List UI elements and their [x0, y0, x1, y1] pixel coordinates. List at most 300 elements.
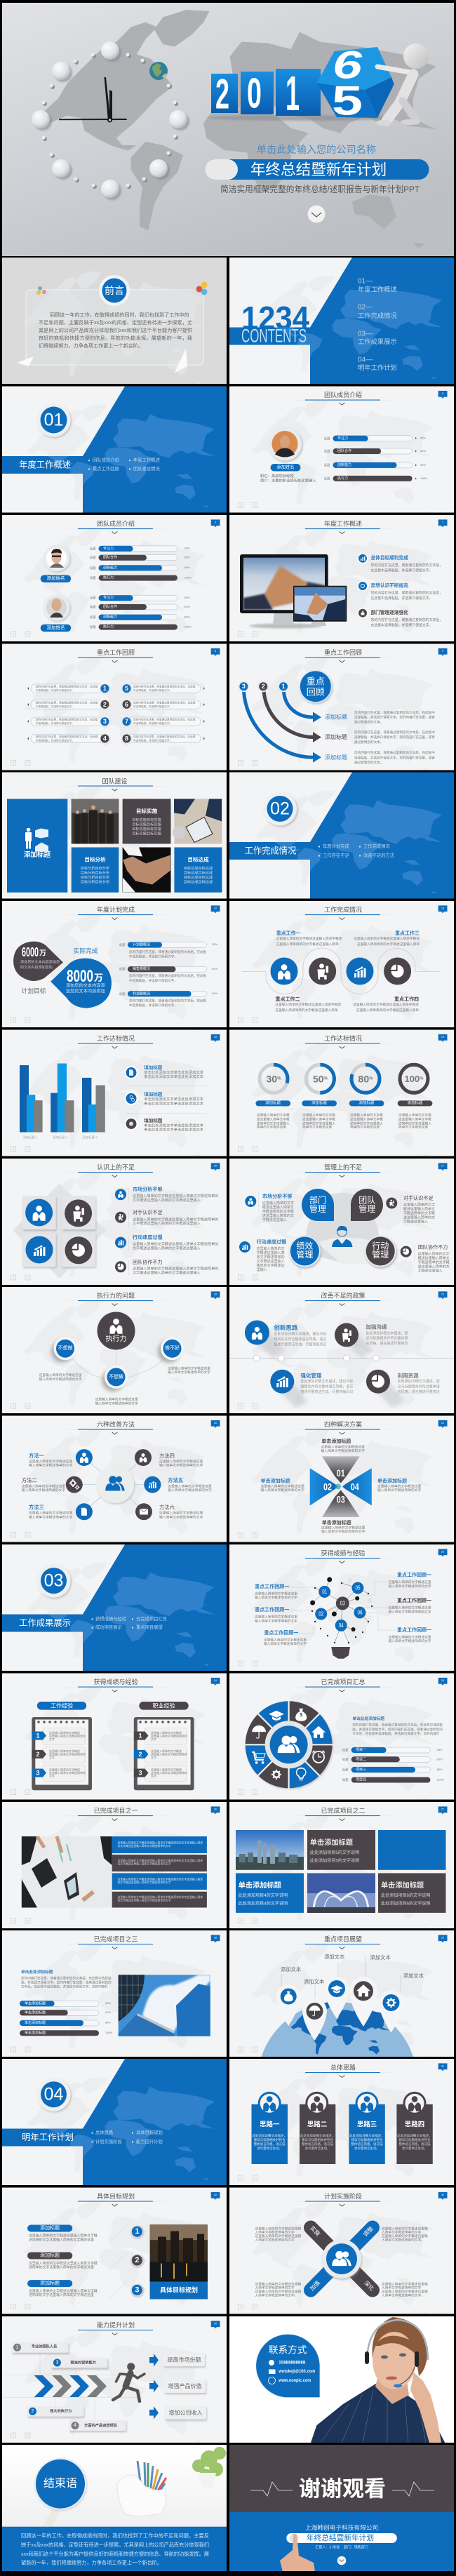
project bars: 单击添加标题 [25, 2001, 46, 2006]
heading: 重点工作回顾 [97, 648, 135, 656]
bar chart: 添加标题 3 [82, 1135, 98, 1140]
pin labels: 添加文本 [304, 1979, 325, 1984]
shortfall list: 团队协作不力 [133, 1259, 163, 1265]
text tiles [112, 1836, 207, 1907]
text tiles: 的文字概述这里输入简单文字概述简单的文字 [118, 1881, 171, 1884]
preface text block: 不足和问题，主要反映于xx及xxx的风格、定型还有待进一步探索，尤 [39, 319, 192, 326]
notebook: work experience [32, 1702, 92, 1790]
notebook: career experience: 这里输入简单文字概述简单的 [151, 1770, 187, 1775]
skill bars two: 标题 [90, 625, 96, 629]
section bullets: 总体思路 [95, 2129, 114, 2135]
skill bars [324, 436, 428, 481]
department management drop: 部门 [309, 1195, 326, 1206]
blue tile: goal achieved [174, 848, 222, 893]
skill bars: 专注力 [337, 436, 348, 441]
gauge 100%: 100% [404, 1074, 424, 1084]
right numbered pills: 您的内容打在这里，或者通过复制您的文本后，在此框 [133, 685, 196, 688]
achievement list: 您的内容打在这里，或者通过复制您的文本后， [370, 591, 443, 595]
note bottom-left: 字概述这里输入简 [257, 1250, 285, 1255]
description [352, 1716, 443, 1736]
blue tile: goal analysis: 目标分析目标分析 [81, 865, 109, 871]
blue tile: goal achieved: 目标达成 [187, 856, 209, 863]
four icon circles [271, 957, 411, 985]
heading: 21 [441, 1422, 444, 1424]
portrait two [43, 594, 71, 622]
key work text top-right [354, 930, 420, 947]
heading: 14 [441, 1036, 444, 1039]
central dark circle: 执行力 [105, 1334, 126, 1343]
note upper-right: 入简单文字概述简单的文字 [382, 2230, 422, 2235]
item resources [366, 1370, 440, 1408]
heading [239, 648, 448, 765]
white 3D figure pushing cube [376, 44, 429, 126]
heading: 获得成绩与经验 [93, 1678, 138, 1686]
heading [239, 1291, 448, 1408]
note bottom-left [239, 1239, 286, 1272]
notebook: career experience: 1 [138, 1732, 142, 1739]
right labels: 重点工作回顾一 [397, 1627, 431, 1633]
outcome arrows and cards: 增加公司收入 [168, 2409, 202, 2416]
method notes: 输入简单文字概述简单的文字 [159, 1514, 203, 1520]
progress bars with notes: 中选择粘贴，并选择只保留文字。 [129, 978, 177, 983]
gauge notes: 述简单的文字这里输入 [257, 1121, 290, 1126]
key work text top-left: 重点工作一 [276, 930, 301, 936]
clock hands [59, 77, 127, 122]
caption pills: 添加标题 [311, 1100, 327, 1105]
blue tile: goal achieved: 目标达成目标达成 [184, 879, 213, 884]
blue tile project four: 此处添加项目4的文字说明 [239, 1900, 288, 1906]
bio: 职位：高级项目经理 [260, 473, 294, 479]
contents list: 工作完成情况 [358, 312, 397, 319]
section bullets: 团队建设情况 [133, 465, 160, 472]
skill bars: 团队合作 [337, 448, 351, 453]
note upper-left: 入简单文字概述简单的文字 [255, 2237, 295, 2242]
dark tile: goal implementation: 目标实施目标实施 [132, 821, 161, 827]
skill bars: 创新能力 [337, 462, 351, 467]
note top-right: 述这里输入简单的文 [403, 1215, 435, 1220]
item resources: 言风格，语言描述尽量简洁 [398, 1389, 440, 1394]
note top-right: 字概述这里输入 [403, 1220, 428, 1224]
key work text bottom-right: 重点工作四 [394, 996, 419, 1002]
heading: 认识上的不足 [97, 1163, 135, 1170]
heading: 获得成绩与经验 [321, 1549, 366, 1556]
section title: 工作成果展示 [19, 1618, 71, 1628]
right numbered pills: 您的内容打在这里，或者通过复制您的文本后，在此框 [133, 735, 196, 738]
lightbulb network [310, 1577, 373, 1659]
world map backdrop [39, 10, 436, 248]
note bottom-left: 文字概述这里输入 [257, 1259, 285, 1264]
gauge notes: 这里输入简单的文字概 [350, 1112, 383, 1117]
capability cards: 丰富的产品运营经验 [84, 2422, 118, 2428]
heading: 工作完成情况 [324, 905, 362, 914]
blue tile project four: 此处添加项目4的文字说明 [239, 1893, 288, 1898]
skill bars one: 60% [184, 556, 190, 559]
note lower-right [382, 2281, 428, 2297]
photo: pencil holder and plant [43, 2447, 226, 2526]
notebook: career experience: 3 [138, 1770, 142, 1777]
gauge notes: 简单的文字概述这里 [398, 1124, 429, 1130]
note right: 这里输入简单的文字概述这里 [168, 1366, 210, 1371]
right labels: 重点工作回顾一 [397, 1571, 431, 1577]
achievement list: 总体目标顺利完成 [370, 554, 408, 561]
guide lines [2, 2353, 142, 2420]
card three: 述尽量简洁生动。 [354, 2146, 380, 2151]
gauge notes: 述这里输入简单文字概 [302, 1116, 335, 1121]
pin labels: 添加文本 [324, 1954, 345, 1960]
note left [261, 1478, 304, 1493]
contents list: 03— [358, 330, 373, 338]
contents list [358, 278, 397, 371]
left numbered pills: 3 [103, 718, 107, 725]
right numbered pills: 中选择粘贴，并选择只保留文字。 [133, 688, 172, 692]
item communication: 此处添加详细文本描述，建 [366, 1330, 408, 1335]
left numbered pills: 4 [103, 735, 107, 742]
note bottom-left: 行动速度过慢 [257, 1239, 286, 1245]
card three: 整体语言风格，语言描 [351, 2142, 383, 2147]
goal list: 添加标题 [40, 2252, 60, 2258]
closing text panel [2, 2527, 227, 2572]
photo: night city [150, 2224, 208, 2282]
team management drop: 管理 [358, 1203, 375, 1214]
note bottom: 这里输入简单的文字概述这里 [321, 1525, 366, 1530]
notebook: work experience: 文字 [49, 1774, 55, 1778]
gauge notes: 这里输入简单的文字概 [302, 1112, 335, 1117]
numbered nodes: 2 [135, 2256, 139, 2264]
heading badge: 前言 [105, 285, 124, 296]
key work text bottom-left: 这里输入简单简单的文字概述这里输入简单 [275, 1008, 338, 1013]
arrow labels and notes: 添加标题 [325, 754, 347, 761]
capability cards: 强大的执行力 [50, 2408, 72, 2413]
four-part hourglass: 02 [323, 1481, 332, 1492]
progress bars with notes: 89% [212, 992, 217, 995]
shortfall list: 文字概述这里输入简单的文字概述这里输入 [133, 1198, 201, 1203]
legend items: 单击此处添加文本单击此处添加文本 [144, 1100, 204, 1106]
panel: closing remarks slide [2, 2445, 227, 2571]
key work text bottom-right [353, 996, 419, 1013]
note bottom-left: 简单的文字概述这 [257, 1263, 285, 1268]
method notes: 输入简单文字概述简单的文字 [29, 1462, 73, 1468]
note upper-right: 入简单文字概述简单的文字。 [382, 2237, 424, 2242]
note right [168, 1366, 210, 1375]
goal list: 这里输入简单的文字概述这里输入简单文字概 [29, 2261, 98, 2266]
closing text panel: 映于xx及xxx的风格、定型还有待进一步探索，尤其是网上的公司产品库充分体现我们 [21, 2542, 209, 2548]
section bullets: 改善不足的方法 [363, 852, 394, 858]
method nodes [66, 1449, 161, 1520]
notebook: work experience: 这里输入简单文字概述简单的 [49, 1751, 86, 1756]
arrow labels and notes: 添加标题 [325, 714, 347, 721]
panel: annual overview slide [229, 515, 454, 641]
card three: 思路三 [357, 2121, 377, 2129]
skill bars one [90, 546, 192, 581]
section bullets [91, 2129, 163, 2144]
magnifier badge with title [34, 2458, 87, 2511]
shortfall list [115, 1186, 218, 1276]
heading: 26 [214, 1808, 217, 1810]
gauge notes: 简单的文字概述这里 [302, 1124, 333, 1130]
panel: completed project two slide [229, 1802, 454, 1928]
blue tile: goal achieved: 目标达成目标达成 [184, 874, 213, 880]
note upper-left: 这里输入简单的文字概述这里输 [255, 2234, 301, 2238]
dark tile: goal implementation: 目标实施目标实施 [132, 817, 161, 822]
clock face [32, 41, 189, 200]
diamond with icon tiles [13, 1184, 106, 1279]
description: 贴，并选择只保留文字。您的内容打在这里，或者通过复制您的 [21, 1980, 112, 1984]
skill bars: 标题 [324, 436, 330, 441]
photo: city towers [236, 1830, 304, 1870]
panel: section 04 slide [2, 2059, 227, 2185]
gauge notes: 述简单的文字这里输入 [302, 1121, 335, 1126]
skill bars: 标题 [324, 476, 330, 481]
photo: call-center woman [311, 2317, 445, 2443]
method notes [22, 1453, 212, 1520]
rounded frame [26, 290, 203, 365]
dark tile project five: 单击添加标题 [310, 1838, 353, 1847]
skill bars two: 执行力 [103, 625, 114, 629]
big numerals: 1234 [241, 300, 309, 336]
gauge notes: 述这里输入简单文字概 [398, 1116, 431, 1121]
panel: four solutions slide [229, 1416, 454, 1542]
name button: 添加姓名 [276, 464, 295, 470]
key work text bottom-left: 这里输入简单的文字概述这里输入简单字概述 [275, 1002, 342, 1007]
key work text top-left: 这里输入简单简单的文字概述这里输入简单 [276, 942, 339, 947]
panel: six methods slide [2, 1416, 227, 1542]
performance management circle: 绩效 [296, 1241, 313, 1250]
legend items: 单击此处添加文本单击此处添加文本 [144, 1096, 204, 1102]
card two: 此处添加详细文本描述， [300, 2133, 335, 2138]
blue tile: goal achieved: 目标达成目标达成 [184, 870, 213, 876]
heading: 已完成项目汇总 [321, 1678, 366, 1686]
method notes: 方法五 [168, 1477, 183, 1483]
blue tile: goal achieved: 目标达成目标达成 [184, 865, 213, 871]
notebook: career experience: 文字 [151, 1774, 156, 1778]
section bullets: 获得成绩与经验 [95, 1615, 127, 1622]
skill bars two: 标题 [90, 596, 96, 601]
dark tile project five: 此处添加项目5的文字说明 [310, 1857, 359, 1863]
numbered nodes: 1 [281, 683, 286, 690]
year cubes 2015 turning to 2016 [207, 42, 396, 124]
cross diagram: 加强 [308, 2279, 321, 2292]
achievement list: 您的内容打在这里，或者通过复制您的文本后， [370, 618, 443, 622]
year cubes 2015 turning to 2016: 5 [332, 79, 363, 124]
section bullets [88, 457, 160, 472]
panel: contact slide [229, 2316, 454, 2443]
photo: arch bridge [307, 1873, 375, 1913]
note bottom-right: 团队协作不力 [418, 1243, 448, 1250]
legend items [125, 1064, 207, 1133]
card three [349, 2092, 385, 2164]
gauge 80%: 80% [358, 1073, 373, 1084]
note top-right: 概述这里输入简单文 [403, 1207, 435, 1211]
skill bars: 标题 [324, 449, 330, 453]
heading [11, 1935, 220, 2052]
heading: 能力提升计划 [97, 2321, 135, 2328]
capability cards: 精准的营销能力 [71, 2360, 96, 2365]
section title: 工作完成情况 [245, 845, 296, 856]
plan target drop: 添加您的文本内容添加您 [20, 959, 60, 964]
project bars: 项目二 [356, 1757, 366, 1761]
skill bars one: 标题 [90, 555, 96, 560]
gauge notes: 述简单的文字这里输入 [350, 1121, 383, 1126]
item management: 题相关并符合整体语言风格，语言 [300, 1384, 353, 1389]
section bullets: 年度工作概述 [133, 457, 160, 463]
dark tile: goal implementation: 目标实施目标实施 [132, 831, 161, 836]
gauge 30% [260, 1065, 288, 1093]
blue node bottom: 不想做 [109, 1373, 123, 1380]
caption pills: 添加标题 [265, 1100, 281, 1105]
notebook: career experience: 文字 [151, 1737, 156, 1741]
note bottom [95, 1396, 138, 1406]
skill bars two: 60% [184, 605, 190, 608]
heading badge [99, 275, 130, 306]
text tiles: 的文字概述这里输入简单文字概述简单的文字 [118, 1862, 171, 1865]
project bars: 项目一 [356, 1748, 366, 1752]
connector lines [287, 1582, 396, 1634]
notebook: career experience: 这里输入简单的文字概述 [151, 1730, 182, 1735]
numbered nodes [238, 681, 289, 692]
connecting arcs [72, 1347, 165, 1378]
closing text panel: xxx和我们这个平台能为客户提供良好的商机和快捷方便的信息、导航的功能发挥。展 [21, 2551, 209, 2557]
notebook: work experience: 这里输入简单的文字概述 [49, 1730, 80, 1735]
skill bars one: 标题 [90, 575, 96, 580]
panel: completed project one slide [2, 1802, 227, 1928]
gauge notes [257, 1112, 431, 1130]
note upper-left: 入简单文字概述简单的文字 [255, 2230, 295, 2235]
item communication: 议与标题相关并符合整体语 [366, 1336, 408, 1341]
project bars: 89% [437, 1768, 443, 1771]
heading: 四种解决方案 [324, 1420, 362, 1428]
project bars: 项目四 [356, 1778, 366, 1782]
note top: 输入简单文字概述简单的文字 [321, 1448, 365, 1453]
project bars: 项目三 [356, 1768, 366, 1772]
closing text panel: 回顾这一年的工作，在取得成绩的同时，我们也找到了工作中的不足和问题，主要反 [21, 2532, 209, 2539]
section number badge [263, 792, 298, 827]
note right [377, 1478, 422, 1493]
note lower-left [255, 2281, 301, 2297]
button one: 添加姓名 [46, 575, 65, 581]
legend items: 填加标题 [144, 1064, 163, 1070]
description: 文本后，在此框中选择粘贴，并选择只保留文字。您的内容打 [21, 1984, 108, 1989]
button one [41, 575, 71, 582]
contact drop shape: www.ooopic.com [278, 2378, 311, 2383]
note lower-left: 入简单文字概述简单的文字 [255, 2285, 295, 2290]
description: 单击此处添加标题 [352, 1716, 384, 1721]
skill bars two: 团队合作 [103, 604, 117, 609]
card two: 思路二 [307, 2121, 327, 2129]
heading [239, 391, 448, 508]
heading: 工作达标情况 [97, 1034, 135, 1042]
method notes: 这里输入简单的文字概述这里 [168, 1483, 212, 1488]
skill bars one: 35% [184, 546, 190, 550]
dark tile project five: 此处添加项目5的文字说明 [310, 1850, 359, 1855]
heading: 25 [441, 1679, 444, 1682]
caption pills [255, 1100, 432, 1106]
heading: 团队成员介绍 [324, 391, 362, 399]
plan target drop [13, 942, 63, 981]
arrow labels and notes: 添加标题 [325, 733, 347, 740]
note left: 输入简单文字概述简单的文字 [261, 1488, 304, 1493]
blue tile project four [236, 1873, 304, 1913]
arrow labels and notes [325, 710, 435, 765]
section bullets: 重点项目展望 [136, 1624, 163, 1630]
actual result drop: 添加您的文本内容添 [66, 982, 105, 988]
panel: section 02 slide [229, 772, 454, 898]
progress bars with notes: 您的内容打在这里，或者通过复制您的文本后，在此框 [129, 998, 207, 1003]
heading [11, 1034, 220, 1151]
section bullets: 年度计划完成 [323, 843, 349, 849]
text tiles: 这里输入简单的文字概述这里输入简单文字概述简单的文字这里输入简单 [118, 1878, 203, 1881]
left labels: 这里输入简单的文字概述这里 [264, 1638, 307, 1642]
dark tile project six: 此处添加项目6的文字说明 [381, 1900, 430, 1906]
panel: key work review slide two [229, 644, 454, 770]
blue title tile [7, 799, 67, 893]
panel: management shortfall slide [229, 1159, 454, 1285]
card one: 述尽量简洁生动。 [257, 2146, 282, 2151]
notebook: career experience: 文字 [151, 1755, 156, 1759]
plan target caption: 计划目标 [21, 987, 46, 994]
skill bars two: 标题 [90, 615, 96, 620]
skill bars two: 89% [184, 615, 190, 619]
shortfall list: 文字概述这里输入简单的文字概述这里输入 [133, 1246, 201, 1250]
heading: 6 [215, 521, 216, 523]
method notes: 这里输入简单的文字概述这里 [159, 1511, 203, 1516]
left numbered pills: 中选择粘贴，并选择只保留文字。 [36, 705, 74, 708]
legend items: 填加标题 [144, 1117, 163, 1123]
heading [239, 1678, 448, 1795]
project bars: 100% [105, 2031, 113, 2034]
heading: 7 [442, 521, 443, 523]
goal list: 述简单的文字这里输入简单的文字概述这里 [29, 2293, 94, 2297]
note top-left: 字概述这里输入 [262, 1217, 287, 1222]
method notes: 这里输入简单的文字概述这里 [29, 1459, 73, 1464]
progress bars with notes: 您的内容打在这里，或者通过复制您的文本后，在此框 [129, 973, 207, 978]
right numbered pills: 中选择粘贴，并选择只保留文字。 [133, 705, 172, 708]
icon: scroll-down chevron button [307, 205, 326, 223]
large monitor with photo [240, 554, 328, 629]
note top-left: 市场分析不够 [262, 1193, 292, 1199]
note bottom-left: 这里输入简单的文 [257, 1246, 285, 1251]
note bottom: 单击添加标题 [322, 1519, 351, 1526]
photo: glass skyscrapers [119, 1975, 210, 2036]
item innovative thinking: 描述尽量简洁生动。尽量将每页幻 [274, 1342, 326, 1347]
contact drop shape [256, 2334, 320, 2398]
blue node left [51, 1337, 77, 1363]
chevrons [34, 2375, 107, 2397]
note bottom-left: 单文字概述简单的 [257, 1255, 285, 1260]
year cubes 2015 turning to 2016: 2 [215, 70, 229, 118]
dark tile project five [307, 1830, 375, 1870]
item management [270, 1370, 353, 1408]
right labels: 这里输入简单的文字概述这里 [389, 1580, 431, 1584]
note top: 单击添加标题 [321, 1438, 351, 1444]
progress bars with notes: 利润额概况 [133, 991, 150, 996]
note upper-left: 这里输入简单的文字概述这里输 [255, 2226, 301, 2231]
notebook: work experience: 这里输入简单的文字概述 [49, 1749, 80, 1753]
icon: balloons right [196, 282, 208, 295]
heading [11, 519, 220, 636]
arrow labels and notes: 通过复制您的文本。 [354, 740, 383, 745]
item innovative thinking: 题相关并符合整体语言风格，语言 [274, 1337, 326, 1342]
note top-right: 对手认识不足 [403, 1194, 434, 1201]
card three: 建议与标题相关并符合 [351, 2137, 383, 2142]
dark tile: goal implementation [123, 799, 171, 843]
text tiles: 的文字概述这里输入简单文字概述简单的文字 [118, 1899, 171, 1902]
note left: 这里输入简单的文字概述这里 [39, 1373, 82, 1377]
text tiles: 这里输入简单的文字概述这里输入简单文字概述简单的文字这里输入简单 [118, 1841, 203, 1844]
right numbered pills: 6 [125, 701, 128, 708]
heading [239, 1420, 448, 1537]
dark tile project six: 单击添加标题 [381, 1881, 424, 1890]
empty blue tile [378, 1830, 446, 1870]
